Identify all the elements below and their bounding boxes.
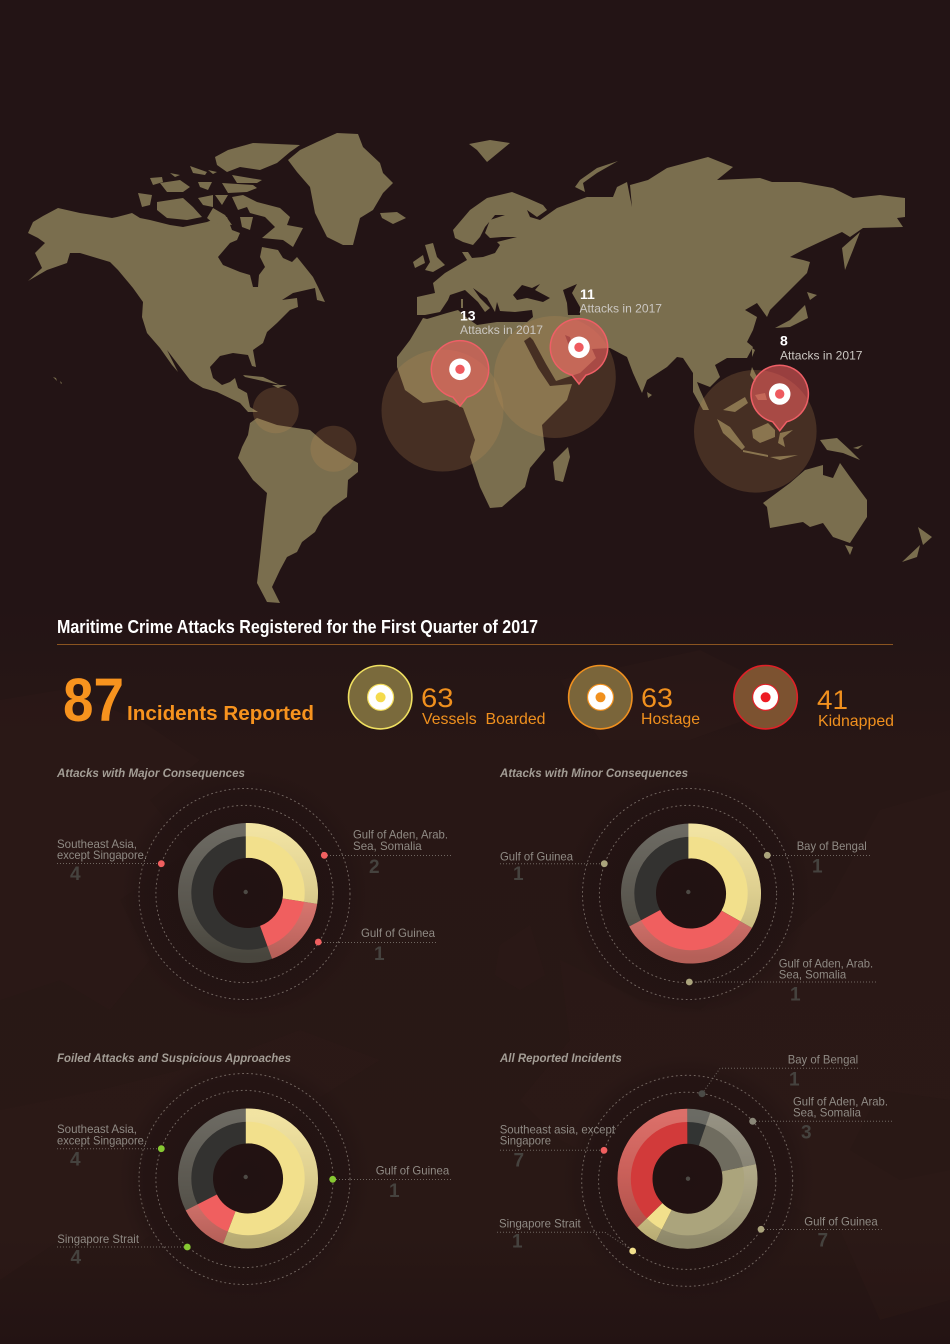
stat: 41 kidnapped [817, 685, 894, 730]
callout: Singapore Strait [57, 1232, 191, 1269]
callout: Gulf of Aden: Sea, Somalia [793, 1106, 861, 1120]
callout: Southeast Asia [500, 1122, 616, 1172]
land: Indonesia and Philippines [717, 367, 863, 460]
callout: Gulf of Aden: 3 [801, 1123, 812, 1144]
area: Gulf of Guinea [382, 350, 504, 472]
callout: Gulf of Guinea: Gulf of Guinea [376, 1164, 449, 1178]
map label: 11 attacks: 11 [580, 286, 595, 302]
callout: Southeast Asia: Southeast asia, except [500, 1122, 616, 1136]
land: Canadian Arctic islands [53, 143, 303, 388]
callout: Bay of Bengal: 1 [812, 857, 823, 878]
callout: Gulf of Aden: Sea, Somalia [353, 839, 422, 853]
panel: foiled attacks and suspicious approaches [57, 1053, 453, 1304]
callout: Gulf of Guinea: 7 [818, 1231, 828, 1252]
land: Eurasia and Africa [397, 157, 905, 508]
callout: Gulf of Aden: Gulf of Aden, Arab. [353, 828, 448, 842]
callout: Gulf of Aden: Sea, Somalia [779, 968, 847, 982]
callout: Gulf of Guinea: Gulf of Guinea [361, 926, 435, 940]
map label: 8 attacks: Attacks in 2017 [780, 348, 863, 362]
callout: Gulf of Aden [686, 956, 878, 1006]
callout: Gulf of Aden: 1 [790, 985, 801, 1006]
callout: Bay of Bengal: Bay of Bengal [797, 839, 867, 853]
callout: Southeast Asia [57, 1122, 165, 1171]
callout: Gulf of Guinea [500, 850, 608, 885]
callout: Southeast Asia: Southeast Asia, [57, 837, 137, 851]
callout: Southeast Asia: except Singapore. [57, 1133, 147, 1147]
stat icon: hostage [569, 666, 632, 729]
area: Caribbean [253, 387, 299, 433]
callout: Gulf of Guinea: Gulf of Guinea [500, 850, 573, 864]
callout: Gulf of Aden: Gulf of Aden, Arab. [793, 1094, 888, 1108]
callout: Gulf of Aden: Gulf of Aden, Arab. [779, 956, 873, 970]
land: Australia [763, 463, 867, 543]
callout: Southeast Asia: 4 [70, 864, 81, 885]
callout: Gulf of Aden [749, 1094, 893, 1144]
pin: Southeast Asia [751, 365, 808, 431]
callout: Southeast Asia: Southeast Asia, [57, 1122, 137, 1136]
panel: all reported incidents [497, 1052, 893, 1305]
world map [28, 133, 932, 603]
callout: Gulf of Guinea [315, 926, 437, 965]
map label: 8 attacks: 8 [780, 332, 788, 348]
callout: Singapore Strait [497, 1216, 636, 1254]
stat: 63 hostage: 63 [641, 683, 673, 713]
callout: Southeast Asia: 7 [514, 1151, 524, 1172]
stat: 87 incidents reported: Incidents Reported [127, 702, 314, 725]
land: Iceland [380, 212, 406, 224]
callout: Gulf of Guinea [329, 1164, 453, 1202]
donut chart [624, 1115, 751, 1242]
land: Tasmania and New Zealand [845, 527, 932, 562]
stat: 63 vessels boarded: 63 [421, 683, 454, 713]
map label: 8 attacks [780, 332, 863, 362]
land: Greenland [288, 133, 393, 245]
stat icon: kidnapped [734, 666, 797, 729]
callout: Gulf of Aden: 2 [369, 857, 380, 878]
map label: 13 attacks: Attacks in 2017 [460, 323, 543, 337]
callout: Bay of Bengal: 1 [789, 1070, 800, 1091]
callout: Gulf of Aden [321, 828, 453, 878]
donut chart [185, 1115, 311, 1242]
stat: 41 kidnapped: 41 [817, 685, 848, 715]
callout: Bay of Bengal [764, 839, 871, 878]
panel: attacks with minor consequences [499, 768, 878, 1019]
stat: 87 incidents reported [63, 666, 314, 734]
callout: Bay of Bengal [698, 1052, 858, 1097]
stat icon: vessels boarded [348, 666, 412, 729]
land: East Asian islands [553, 232, 860, 482]
land: South America [238, 418, 358, 603]
callout: Southeast Asia: Singapore [500, 1134, 551, 1148]
stat: 63 hostage [641, 683, 700, 728]
map label: 13 attacks [460, 308, 543, 337]
map label: 11 attacks [580, 286, 662, 316]
pin: Gulf of Aden [550, 319, 608, 384]
donut chart [628, 830, 754, 957]
panel heading: Foiled Attacks and Suspicious Approaches [57, 1053, 291, 1065]
stat: 87 incidents reported: 87 [63, 666, 124, 734]
callout: Gulf of Guinea: 1 [374, 944, 385, 965]
panel: attacks with major consequences [56, 768, 453, 1019]
callout: Southeast Asia: except Singapore. [57, 848, 147, 862]
callout: Gulf of Guinea: 1 [389, 1181, 400, 1202]
donut chart [185, 830, 311, 956]
callout: Southeast Asia [57, 837, 165, 885]
callout: Singapore Strait: Singapore Strait [57, 1232, 140, 1246]
area: Brazil coast [310, 426, 356, 472]
callout: Southeast Asia: 4 [70, 1150, 81, 1171]
callout: Singapore Strait: Singapore Strait [499, 1216, 581, 1230]
area: Southeast Asia [694, 370, 817, 493]
title: Maritime Crime Attacks Registered for the First Quarter of 2017 [57, 617, 538, 637]
map label: 13 attacks: 13 [460, 308, 476, 324]
panel heading: Attacks with Minor Consequences [499, 768, 688, 780]
stat: 63 vessels boarded [421, 683, 546, 728]
incident area circles [253, 316, 817, 493]
callout: Singapore Strait: 1 [512, 1232, 523, 1253]
map label: 11 attacks: Attacks in 2017 [580, 302, 662, 316]
callout: Bay of Bengal: Bay of Bengal [788, 1052, 858, 1066]
land: North America [28, 208, 325, 412]
stat: 41 kidnapped: Kidnapped [818, 713, 894, 730]
stat: 63 vessels boarded: Vessels Boarded [422, 711, 546, 728]
callout: Gulf of Guinea: 1 [513, 864, 524, 885]
panel heading: All Reported Incidents [499, 1053, 622, 1065]
inland seas [513, 284, 585, 352]
land: islands of Europe [413, 140, 618, 308]
callout: Gulf of Guinea: Gulf of Guinea [804, 1215, 878, 1229]
panel heading: Attacks with Major Consequences [56, 768, 245, 780]
pin: Gulf of Guinea [431, 341, 489, 406]
stat: 63 hostage: Hostage [641, 711, 700, 728]
callout: Gulf of Guinea [758, 1215, 882, 1252]
area: Gulf of Aden [494, 316, 616, 438]
callout: Singapore Strait: 4 [70, 1248, 82, 1269]
